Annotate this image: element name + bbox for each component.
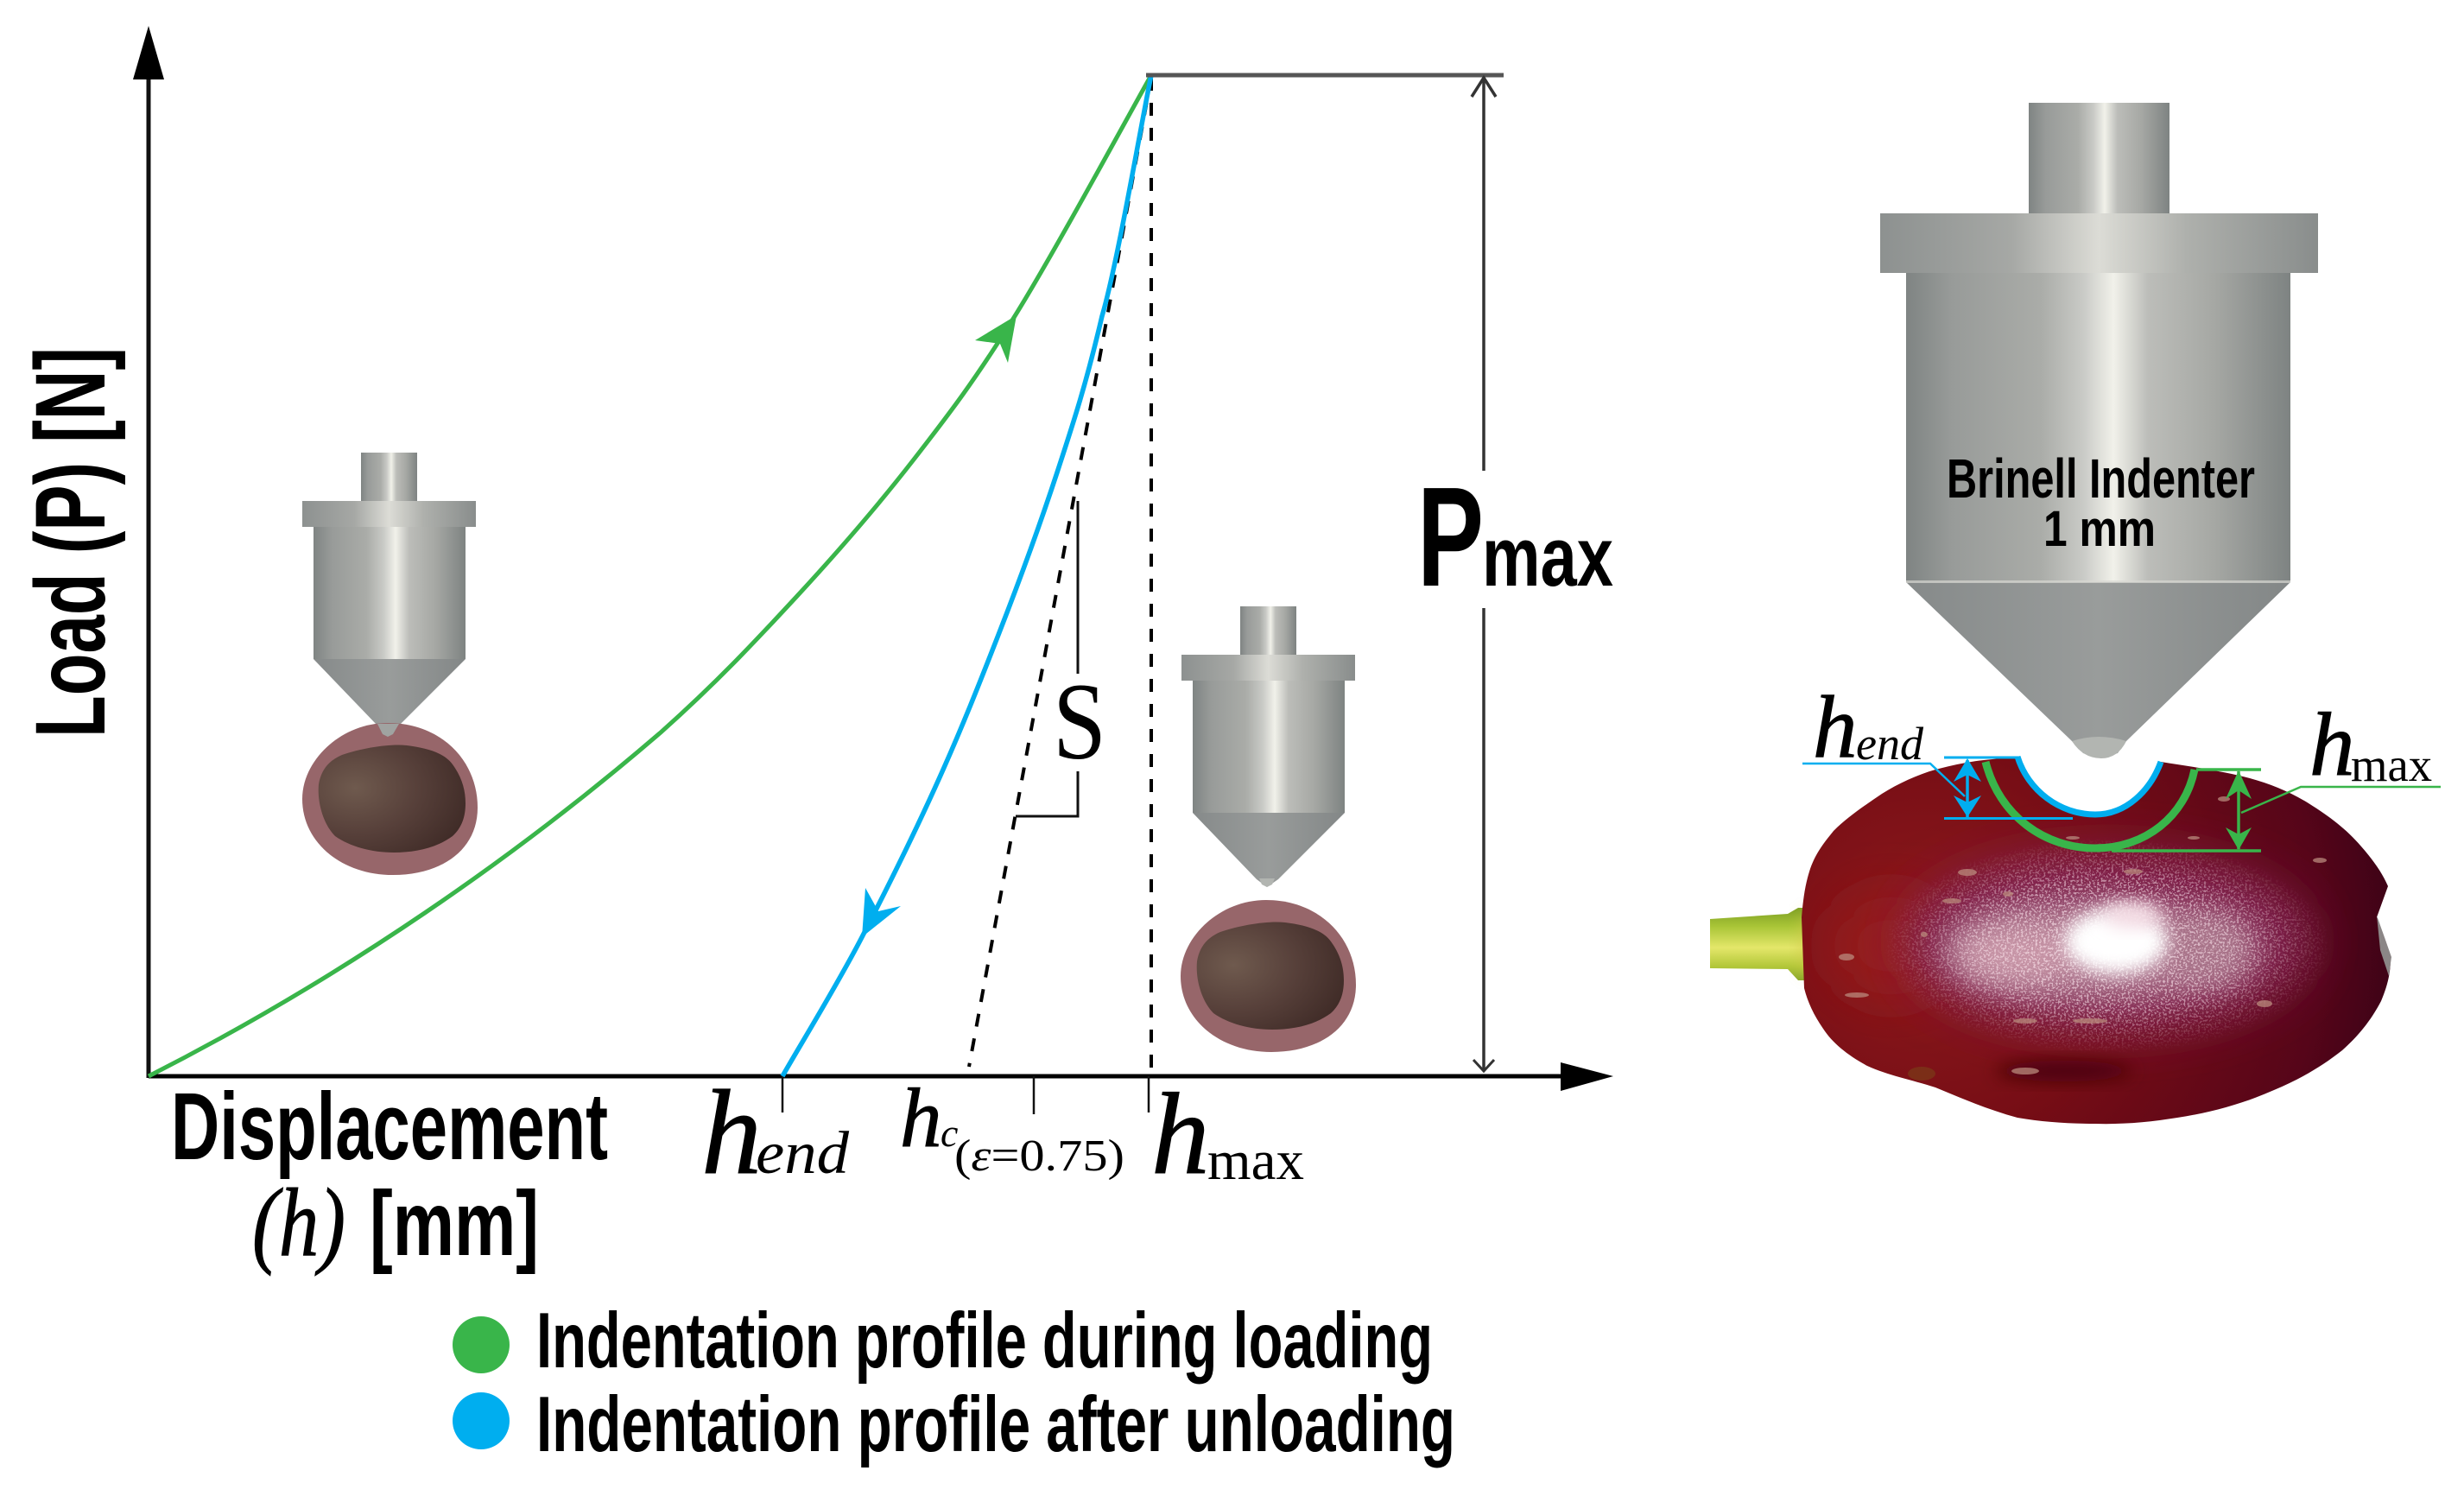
axis ticks	[782, 1076, 1149, 1114]
legend item: unloading	[453, 1381, 1455, 1468]
label: h max: h	[1151, 1070, 1209, 1199]
icon: bean under second indenter	[1181, 900, 1356, 1052]
label: h c at epsilon 0.75: (ε=0.75)	[954, 1132, 1124, 1181]
label: P max	[1417, 458, 1613, 616]
panel: Brinell indenter over coffee fruit	[1710, 103, 2441, 1140]
label: h c at epsilon 0.75	[900, 1072, 1124, 1181]
indenter label: 1 mm	[2043, 501, 2156, 557]
x axis title	[171, 1074, 608, 1277]
legend item: unloading: Indentation profile after unloading	[536, 1381, 1455, 1468]
label: h max on fruit: h	[2309, 694, 2354, 795]
label: h c at epsilon 0.75: c	[941, 1111, 958, 1155]
indenter label	[1947, 447, 2255, 557]
stiffness bracket	[1016, 501, 1078, 816]
y axis title: Load (P) [N]	[16, 347, 126, 738]
x axis title: [mm]	[370, 1173, 539, 1275]
icon: small indenter above bean, retracted	[1181, 606, 1355, 887]
x axis with arrow	[149, 1062, 1613, 1091]
loading curve (green) with arrow	[149, 75, 1151, 1076]
label: h max on fruit: max	[2351, 738, 2432, 791]
icon: large Brinell indenter	[1880, 103, 2318, 758]
label: P max: P	[1417, 458, 1484, 616]
legend item: loading: Indentation profile during loading	[536, 1297, 1433, 1385]
dashed lines from peak	[969, 78, 1151, 1071]
label: h c at epsilon 0.75: h	[900, 1072, 941, 1164]
indenter label: Brinell Indenter	[1947, 447, 2255, 510]
y axis with arrow	[133, 26, 164, 1078]
x axis title: Displacement	[171, 1074, 608, 1180]
x axis title: (h)	[252, 1170, 345, 1277]
icon: bean under first indenter	[302, 723, 478, 875]
icon: small indenter above bean, in contact	[302, 453, 476, 732]
legend item: loading	[453, 1297, 1433, 1385]
unloading curve (blue) with arrow	[782, 75, 1151, 1076]
indentation profile after unloading (blue)	[2017, 757, 2161, 815]
h max dimension, green	[2112, 770, 2441, 851]
label: h end: h	[701, 1066, 762, 1200]
label: h max on fruit	[2309, 694, 2432, 795]
coffee fruit body	[1802, 758, 2391, 1125]
panel: load-displacement chart	[16, 26, 1613, 1277]
fruit tip	[2377, 916, 2391, 976]
coffee fruit stem	[1710, 908, 1821, 980]
label: h end on fruit: h	[1813, 678, 1857, 777]
indentation profile during loading (green)	[1986, 762, 2195, 848]
peak horizontal line	[1146, 73, 1504, 78]
label: h end on fruit: end	[1856, 718, 1924, 770]
h end dimension, blue	[1802, 758, 2073, 819]
P max dimension arrow	[1472, 78, 1496, 1071]
label: S: S	[1053, 662, 1106, 783]
label: h end	[701, 1066, 850, 1200]
label: h end: end	[756, 1120, 850, 1187]
label: h end on fruit	[1813, 678, 1924, 777]
legend	[453, 1297, 1455, 1468]
label: P max: max	[1482, 510, 1613, 604]
label: h max: max	[1207, 1130, 1304, 1192]
label: h max	[1151, 1070, 1304, 1199]
